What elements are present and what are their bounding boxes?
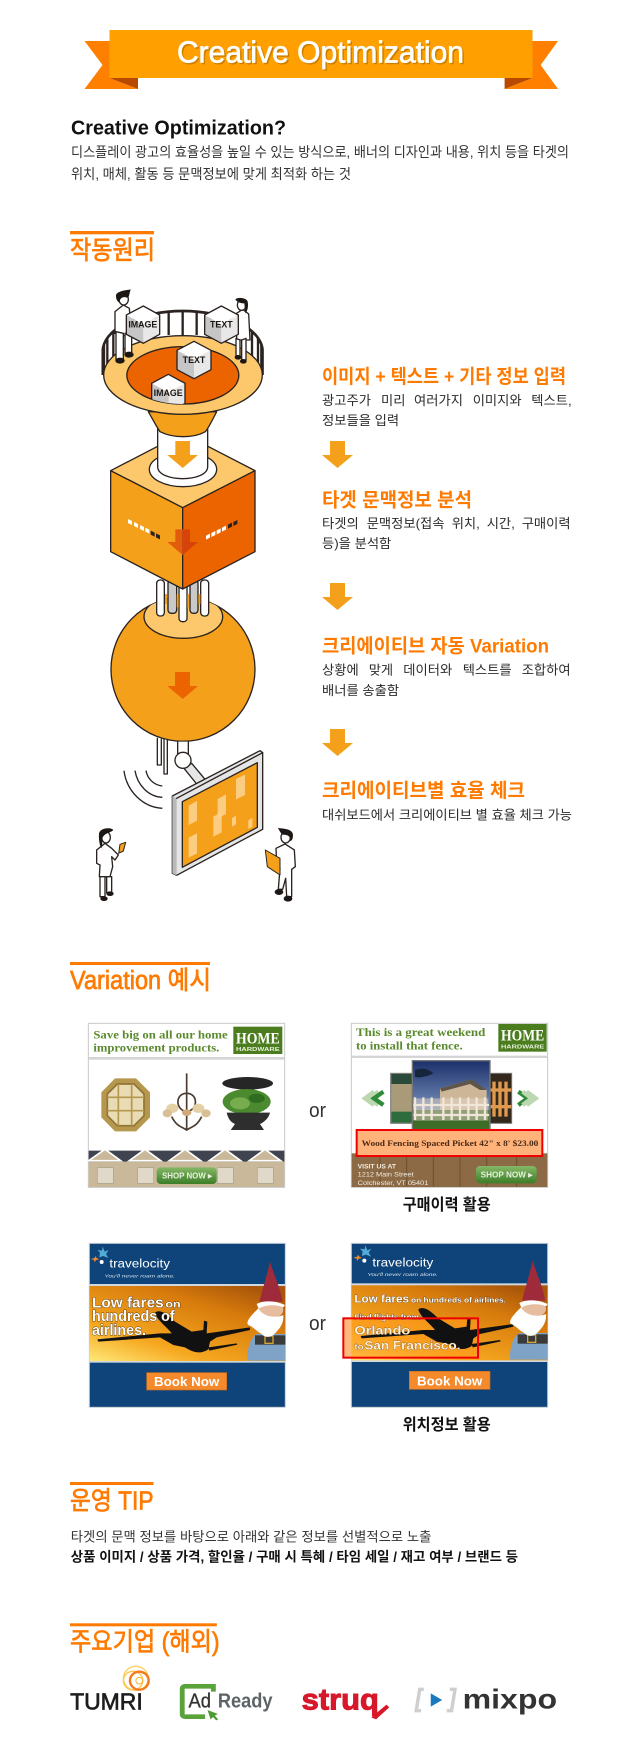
logo: HOME xyxy=(501,1028,544,1045)
highlighted price box xyxy=(357,1130,542,1156)
sky strip xyxy=(351,1261,553,1362)
step 3: variation: 크리에이티브 자동 Variation xyxy=(322,636,549,658)
headline: Low fares xyxy=(354,1294,409,1306)
fence band: 1212 Main Street xyxy=(358,1173,414,1179)
step 1: input: 여러가지 xyxy=(414,393,463,408)
step 2: analysis: 문맥정보(접속 xyxy=(367,516,445,531)
step 1: input xyxy=(322,366,572,428)
person: man with clipboard xyxy=(265,828,295,902)
logo: You'll never roam alone. xyxy=(104,1273,175,1279)
step 1: input: 이미지와 xyxy=(473,393,522,408)
heading: variation examples: Variation 예시 xyxy=(70,967,211,995)
logo: travelocity xyxy=(372,1256,433,1270)
cube and funnel xyxy=(103,289,263,589)
highlighted location box: to xyxy=(354,1342,364,1351)
headline: Find flights from: xyxy=(354,1314,422,1321)
plane xyxy=(97,1311,250,1352)
step 1: input: 텍스트, xyxy=(531,393,572,408)
icon: falling text cube xyxy=(177,341,211,379)
signal arcs xyxy=(124,771,162,808)
title text: Creative Optimization xyxy=(177,34,464,70)
banner: home hardware fence: to install that fence. xyxy=(356,1040,463,1052)
gnome xyxy=(510,1261,553,1360)
step 3: variation xyxy=(322,636,571,698)
arrow xyxy=(322,729,353,756)
plane xyxy=(361,1308,513,1349)
person: woman with text cube xyxy=(235,298,250,364)
button: SHOP NOW ▸ xyxy=(162,1171,213,1181)
headline: on xyxy=(165,1299,181,1310)
tips text: 타겟의 문맥 정보를 바탕으로 아래와 같은 정보를 선별적으로 노출 xyxy=(71,1530,431,1545)
logo: mixpo: mixpo xyxy=(463,1684,557,1715)
monitor xyxy=(172,751,263,875)
icon: image cube xyxy=(126,306,160,343)
arrow xyxy=(322,441,353,468)
caption: location: 위치정보 활용 xyxy=(403,1416,491,1434)
tips text: 상품 이미지 / 상품 가격, 할인율 / 구매 시 특혜 / 타임 세일 / 재고 여부 / 브랜드 등 xyxy=(71,1550,518,1565)
headline xyxy=(354,1294,506,1321)
tube with arrow xyxy=(149,420,217,487)
highlighted location box: Orlando xyxy=(354,1323,411,1337)
step 4: check: 크리에이티브별 효율 체크 xyxy=(322,780,525,802)
intro text block: 위치, 매체, 활동 등 문맥정보에 맞게 최적화 하는 것 xyxy=(71,166,351,182)
step 2: analysis xyxy=(322,490,571,551)
headline: hundreds of xyxy=(92,1309,175,1325)
step 2: analysis: 타겟의 xyxy=(322,516,359,531)
step 4: check: 대쉬보드에서 크리에이티브 별 효율 체크 가능 xyxy=(322,808,572,822)
button xyxy=(157,1167,217,1184)
banner: travelocity low fares xyxy=(89,1243,290,1407)
logo xyxy=(498,1024,547,1052)
heading: major companies: 주요기업 (해외) xyxy=(70,1629,220,1657)
plant xyxy=(222,1077,273,1130)
title text: Creative Optimization xyxy=(178,36,466,71)
logo: tumri: TUMRI xyxy=(70,1689,143,1715)
headline: airlines. xyxy=(92,1323,146,1339)
step 1: input: 이미지 + 텍스트 + 기타 정보 입력 xyxy=(322,366,566,388)
highlighted location box: San Francisco. xyxy=(364,1338,460,1352)
window xyxy=(101,1078,150,1131)
highlighted price box: Wood Fencing Spaced Picket 42" x 8' $23.00 xyxy=(362,1139,538,1148)
step 1: input: 정보들을 입력 xyxy=(322,413,399,428)
banner: home hardware fence xyxy=(351,1023,548,1187)
logo: HARDWARE xyxy=(501,1044,545,1050)
intro text block xyxy=(71,118,569,182)
fence band: Colchester, VT 05401 xyxy=(358,1181,429,1187)
chandelier xyxy=(163,1073,211,1131)
cube xyxy=(111,433,255,589)
button xyxy=(147,1373,227,1390)
highlighted location box xyxy=(343,1318,478,1358)
step 2: analysis: 등)을 분석함 xyxy=(322,536,391,551)
tips text xyxy=(71,1530,518,1565)
fence band: VISIT US AT xyxy=(358,1164,396,1170)
funnel xyxy=(104,336,262,437)
step 1: input: 미리 xyxy=(381,393,405,408)
button: Book Now xyxy=(154,1375,219,1389)
step 1: input: 광고주가 xyxy=(322,393,371,408)
heading: operation tips: 운영 TIP xyxy=(70,1488,154,1516)
logo: adready: Ready xyxy=(218,1691,273,1713)
railing xyxy=(103,311,263,375)
chevrons xyxy=(365,1092,536,1105)
step 3: variation: 조합하여 xyxy=(522,662,571,678)
intro text block: Creative Optimization? xyxy=(71,118,286,140)
step 2: analysis: 위치, xyxy=(452,516,480,531)
step 3: variation: 데이터와 xyxy=(403,662,452,678)
step 3: variation: 상황에 xyxy=(322,662,359,678)
icon: image cube: IMAGE xyxy=(128,320,157,330)
banner: home hardware products: improvement products. xyxy=(93,1043,220,1055)
arrow xyxy=(322,583,353,610)
gnome xyxy=(247,1262,290,1361)
logo: tumri xyxy=(70,1666,149,1715)
button: Book Now xyxy=(417,1374,482,1388)
monitor, signal and people xyxy=(97,751,295,902)
logo: HOME xyxy=(236,1030,280,1047)
title ribbon xyxy=(84,30,558,89)
person: man with image cube xyxy=(115,289,134,364)
house photo xyxy=(412,1061,490,1135)
label: or: or xyxy=(309,1100,326,1122)
connecting tubes xyxy=(157,580,209,622)
step 4: check xyxy=(322,780,572,822)
step 2: analysis: 타겟 문맥정보 분석 xyxy=(322,490,472,512)
heading: how it works: 작동원리 xyxy=(70,237,155,265)
icon: falling image cube: IMAGE xyxy=(154,388,183,398)
logo: travelocity xyxy=(109,1257,170,1271)
logo: adready xyxy=(182,1686,273,1720)
banner: home hardware products xyxy=(88,1023,285,1187)
person: woman with tablet xyxy=(97,828,126,901)
step 3: variation: 배너를 송출함 xyxy=(322,683,399,698)
button xyxy=(409,1371,490,1389)
logo: mixpo xyxy=(416,1684,557,1715)
icon: falling text cube: TEXT xyxy=(183,355,206,365)
sphere xyxy=(111,595,255,784)
icon: text cube: TEXT xyxy=(210,320,233,330)
banner: travelocity orlando xyxy=(343,1243,553,1407)
fence band xyxy=(352,1153,547,1187)
label: or: or xyxy=(309,1313,326,1335)
logo xyxy=(353,1245,438,1278)
headline: on hundreds of airlines. xyxy=(411,1296,506,1305)
process illustration xyxy=(97,289,295,902)
headline: Low fares xyxy=(92,1295,164,1311)
logo: adready: Ad xyxy=(188,1691,211,1713)
icon: text cube xyxy=(205,306,238,343)
logo xyxy=(233,1027,282,1054)
icon: falling image cube xyxy=(151,374,186,404)
headline xyxy=(92,1295,181,1339)
caption: purchase history: 구매이력 활용 xyxy=(403,1196,491,1214)
logo: You'll never roam alone. xyxy=(367,1272,438,1278)
fence band: SHOP NOW ▸ xyxy=(481,1169,533,1179)
banner: home hardware fence: This is a great weekend xyxy=(356,1027,486,1039)
fence thumbnails xyxy=(391,1073,512,1123)
company logos xyxy=(70,1666,557,1720)
logo xyxy=(91,1247,175,1279)
sky strip xyxy=(89,1262,290,1363)
logo: HARDWARE xyxy=(236,1047,280,1053)
banner: home hardware products: Save big on all our home xyxy=(93,1029,228,1041)
step 3: variation: 맞게 xyxy=(369,662,393,678)
step 3: variation: 텍스트를 xyxy=(463,662,512,678)
step 2: analysis: 시간, xyxy=(487,516,515,531)
logo: struq: struq xyxy=(302,1683,379,1716)
step 2: analysis: 구매이력 xyxy=(522,516,571,531)
intro text block: 디스플레이 광고의 효율성을 높일 수 있는 방식으로, 배너의 디자인과 내용, 위치 등을 타겟의 xyxy=(71,144,569,160)
roofline xyxy=(89,1149,284,1187)
